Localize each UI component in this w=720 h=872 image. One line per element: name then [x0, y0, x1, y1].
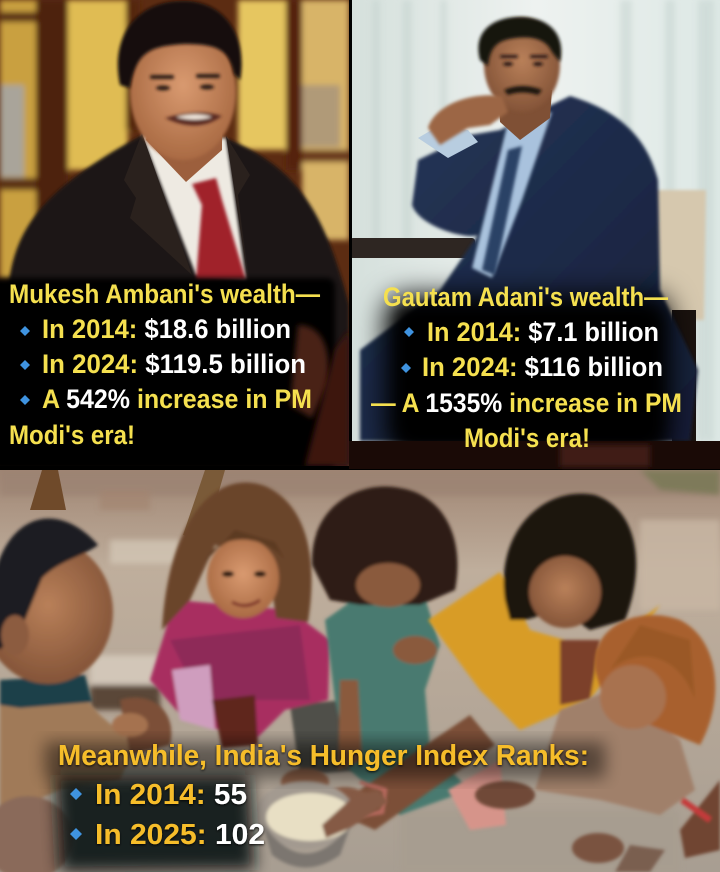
curtain folds	[372, 0, 714, 441]
neck	[498, 90, 552, 140]
text block: Adani wealth: In 2024: $116 billion	[422, 352, 663, 382]
bowl of food	[255, 781, 388, 868]
child: girl in yellow	[319, 494, 660, 830]
panel: children eating photo	[0, 470, 720, 872]
hair	[478, 17, 561, 66]
bullet	[20, 360, 30, 370]
bullet	[401, 363, 411, 373]
bullet	[20, 326, 30, 336]
panel: Gautam Adani photo	[350, 0, 720, 455]
tree stumps	[30, 470, 66, 510]
hair	[118, 1, 242, 88]
text block: Adani wealth: Modi's era!	[464, 423, 590, 453]
hand at chin	[428, 95, 508, 145]
text block: Adani wealth: In 2014: $7.1 billion	[427, 317, 659, 347]
eyes moustache	[500, 55, 548, 95]
hand and sleeve	[290, 325, 329, 418]
lapels	[124, 133, 192, 275]
text block: hunger index: In 2014: 55	[95, 779, 247, 811]
text block: Adani wealth	[371, 282, 682, 453]
dark shadow behind caption	[55, 775, 255, 872]
face	[128, 42, 237, 160]
text block: hunger index: Meanwhile, India's Hunger Index Ranks:	[58, 740, 589, 772]
small child on right	[475, 615, 720, 872]
chair	[650, 190, 706, 320]
text backdrop	[0, 278, 335, 470]
eyes brows mouth	[150, 74, 222, 126]
text block: Adani wealth: Gautam Adani's wealth—	[383, 282, 668, 312]
neck	[146, 136, 222, 182]
suit	[0, 135, 349, 466]
text backdrop	[385, 295, 670, 455]
text block: Ambani wealth: A 542% increase in PM	[42, 384, 312, 414]
shirt	[472, 112, 552, 278]
text block: Ambani wealth: Mukesh Ambani's wealth—	[9, 279, 320, 309]
child: girl in pink	[150, 483, 360, 775]
child: girl in teal	[281, 487, 470, 815]
ground texture	[4, 470, 720, 714]
bullet	[70, 788, 82, 800]
bookshelf background	[0, 0, 349, 280]
dark band under top right photo	[349, 441, 720, 469]
shirt	[142, 135, 246, 280]
table edge	[350, 238, 475, 258]
suit	[360, 96, 698, 441]
text block: Adani wealth: — A 1535% increase in PM	[371, 388, 682, 418]
bullet	[404, 327, 414, 337]
text block: hunger index	[58, 740, 589, 851]
bullet	[20, 395, 30, 405]
text block: Ambani wealth: In 2024: $119.5 billion	[42, 349, 306, 379]
tie	[482, 146, 522, 275]
text block: Ambani wealth: Modi's era!	[9, 420, 135, 450]
tie	[192, 178, 246, 280]
text block: Ambani wealth	[9, 279, 320, 450]
panel: Mukesh Ambani photo	[0, 0, 349, 470]
bullet	[70, 828, 82, 840]
child: boy on left	[0, 518, 171, 872]
text block: hunger index: In 2025: 102	[95, 819, 265, 851]
face	[484, 18, 560, 112]
text block: Ambani wealth: In 2014: $18.6 billion	[42, 314, 291, 344]
